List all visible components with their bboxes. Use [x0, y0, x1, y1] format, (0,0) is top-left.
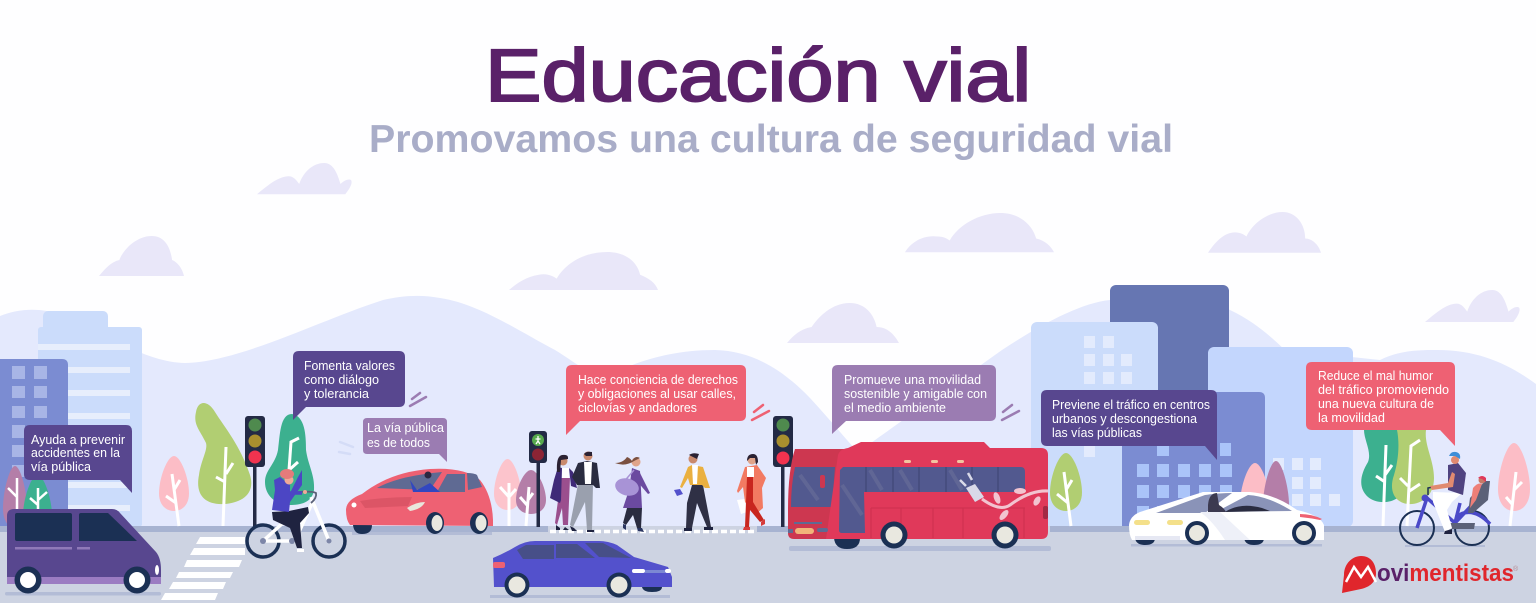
- tree: light green right of bus: [1050, 453, 1082, 526]
- logo: Movimentistas: ovimentistas: [1377, 560, 1514, 587]
- subtitle: Promovamos una cultura de seguridad vial: [369, 118, 1173, 161]
- callout: movilidad sostenible: el medio ambiente: [844, 401, 946, 415]
- tree: pink and mauve behind car: [1240, 461, 1289, 526]
- kerb: [0, 526, 1536, 532]
- tree: teal: [265, 414, 314, 505]
- hills background: [0, 295, 1536, 530]
- tree: teal right: [1361, 430, 1400, 526]
- callout: tráfico: Previene el tráfico en centros: [1052, 398, 1210, 412]
- callout: mal humor: Reduce el mal humor: [1318, 369, 1433, 383]
- crosswalk: [161, 537, 245, 600]
- callout: mal humor: [1306, 362, 1455, 446]
- pedestrian: woman with bag: [613, 457, 650, 532]
- logo: Movimentistas: ®: [1513, 565, 1519, 573]
- callout: conciencia: Hace conciencia de derechos: [578, 373, 738, 387]
- callout: prevenir accidentes: [24, 425, 132, 493]
- pedestrian: man in dark jacket: [570, 452, 600, 532]
- logo: Movimentistas: [1342, 556, 1519, 593]
- callout: tráfico: [1041, 390, 1217, 460]
- building: left light tower: [38, 311, 142, 527]
- white car: [1129, 492, 1324, 546]
- callout: prevenir accidentes: accidentes en la: [31, 446, 120, 460]
- callout: prevenir accidentes: Ayuda a prevenir: [31, 433, 125, 447]
- tree: pink: [159, 456, 189, 526]
- buildings: right cluster: [1031, 285, 1353, 527]
- road: [0, 526, 1536, 603]
- pedestrian: woman in purple coat: [550, 455, 577, 530]
- traffic light: left: [245, 416, 265, 527]
- accent marks: [339, 393, 1019, 454]
- van: [5, 509, 161, 596]
- callout: valores: como diálogo: [304, 373, 379, 387]
- traffic light: centre: [773, 416, 793, 527]
- traffic light: pedestrian: [529, 431, 547, 527]
- callout: movilidad sostenible: Promueve una movilidad: [844, 373, 981, 387]
- pedestrian: woman in orange coat: [737, 454, 766, 530]
- callout: mal humor: una nueva cultura de: [1318, 397, 1434, 411]
- callout: mal humor: del tráfico promoviendo: [1318, 383, 1449, 397]
- family cyclist: [1400, 452, 1490, 547]
- trees: [3, 403, 1530, 535]
- callout: valores: y tolerancia: [304, 387, 369, 401]
- callout: mal humor: la movilidad: [1318, 411, 1385, 425]
- tree: mauve centre: [516, 470, 546, 526]
- callout: conciencia: [566, 365, 746, 435]
- clouds: [99, 163, 1520, 343]
- bus: [788, 442, 1051, 551]
- blue car: [490, 541, 672, 598]
- callout: movilidad sostenible: sostenible y amigable con: [844, 387, 987, 401]
- callout: valores: Fomenta valores: [304, 359, 395, 373]
- callout: movilidad sostenible: [832, 365, 996, 434]
- cyclist left: [247, 469, 345, 557]
- callout: tráfico: las vías públicas: [1052, 426, 1142, 440]
- tree: pink centre: [494, 459, 521, 526]
- tree: pink far right: [1498, 443, 1530, 526]
- pedestrian: man in yellow jacket: [674, 453, 713, 531]
- callout: valores: [293, 351, 405, 420]
- callout: tráfico: urbanos y descongestiona: [1052, 412, 1197, 426]
- tree: teal left: [23, 475, 52, 535]
- tree: light green: [195, 403, 251, 526]
- callout: vía pública: [363, 418, 447, 462]
- callout: conciencia: ciclovías y andadores: [578, 401, 697, 415]
- callout: vía pública: es de todos: [367, 436, 430, 450]
- callout: conciencia: y obligaciones al usar calles,: [578, 387, 736, 401]
- icon: plug with vine: [960, 473, 1048, 522]
- tree: mauve left: [3, 466, 27, 528]
- tree: light green right: [1392, 430, 1434, 526]
- pedestrian crossing dashes: [550, 530, 757, 533]
- callout: prevenir accidentes: vía pública: [31, 460, 91, 474]
- building: left dark tower: [0, 359, 68, 527]
- title: Educación vial: [485, 34, 1031, 117]
- red car: [346, 469, 493, 535]
- callout: vía pública: La vía pública: [367, 421, 444, 435]
